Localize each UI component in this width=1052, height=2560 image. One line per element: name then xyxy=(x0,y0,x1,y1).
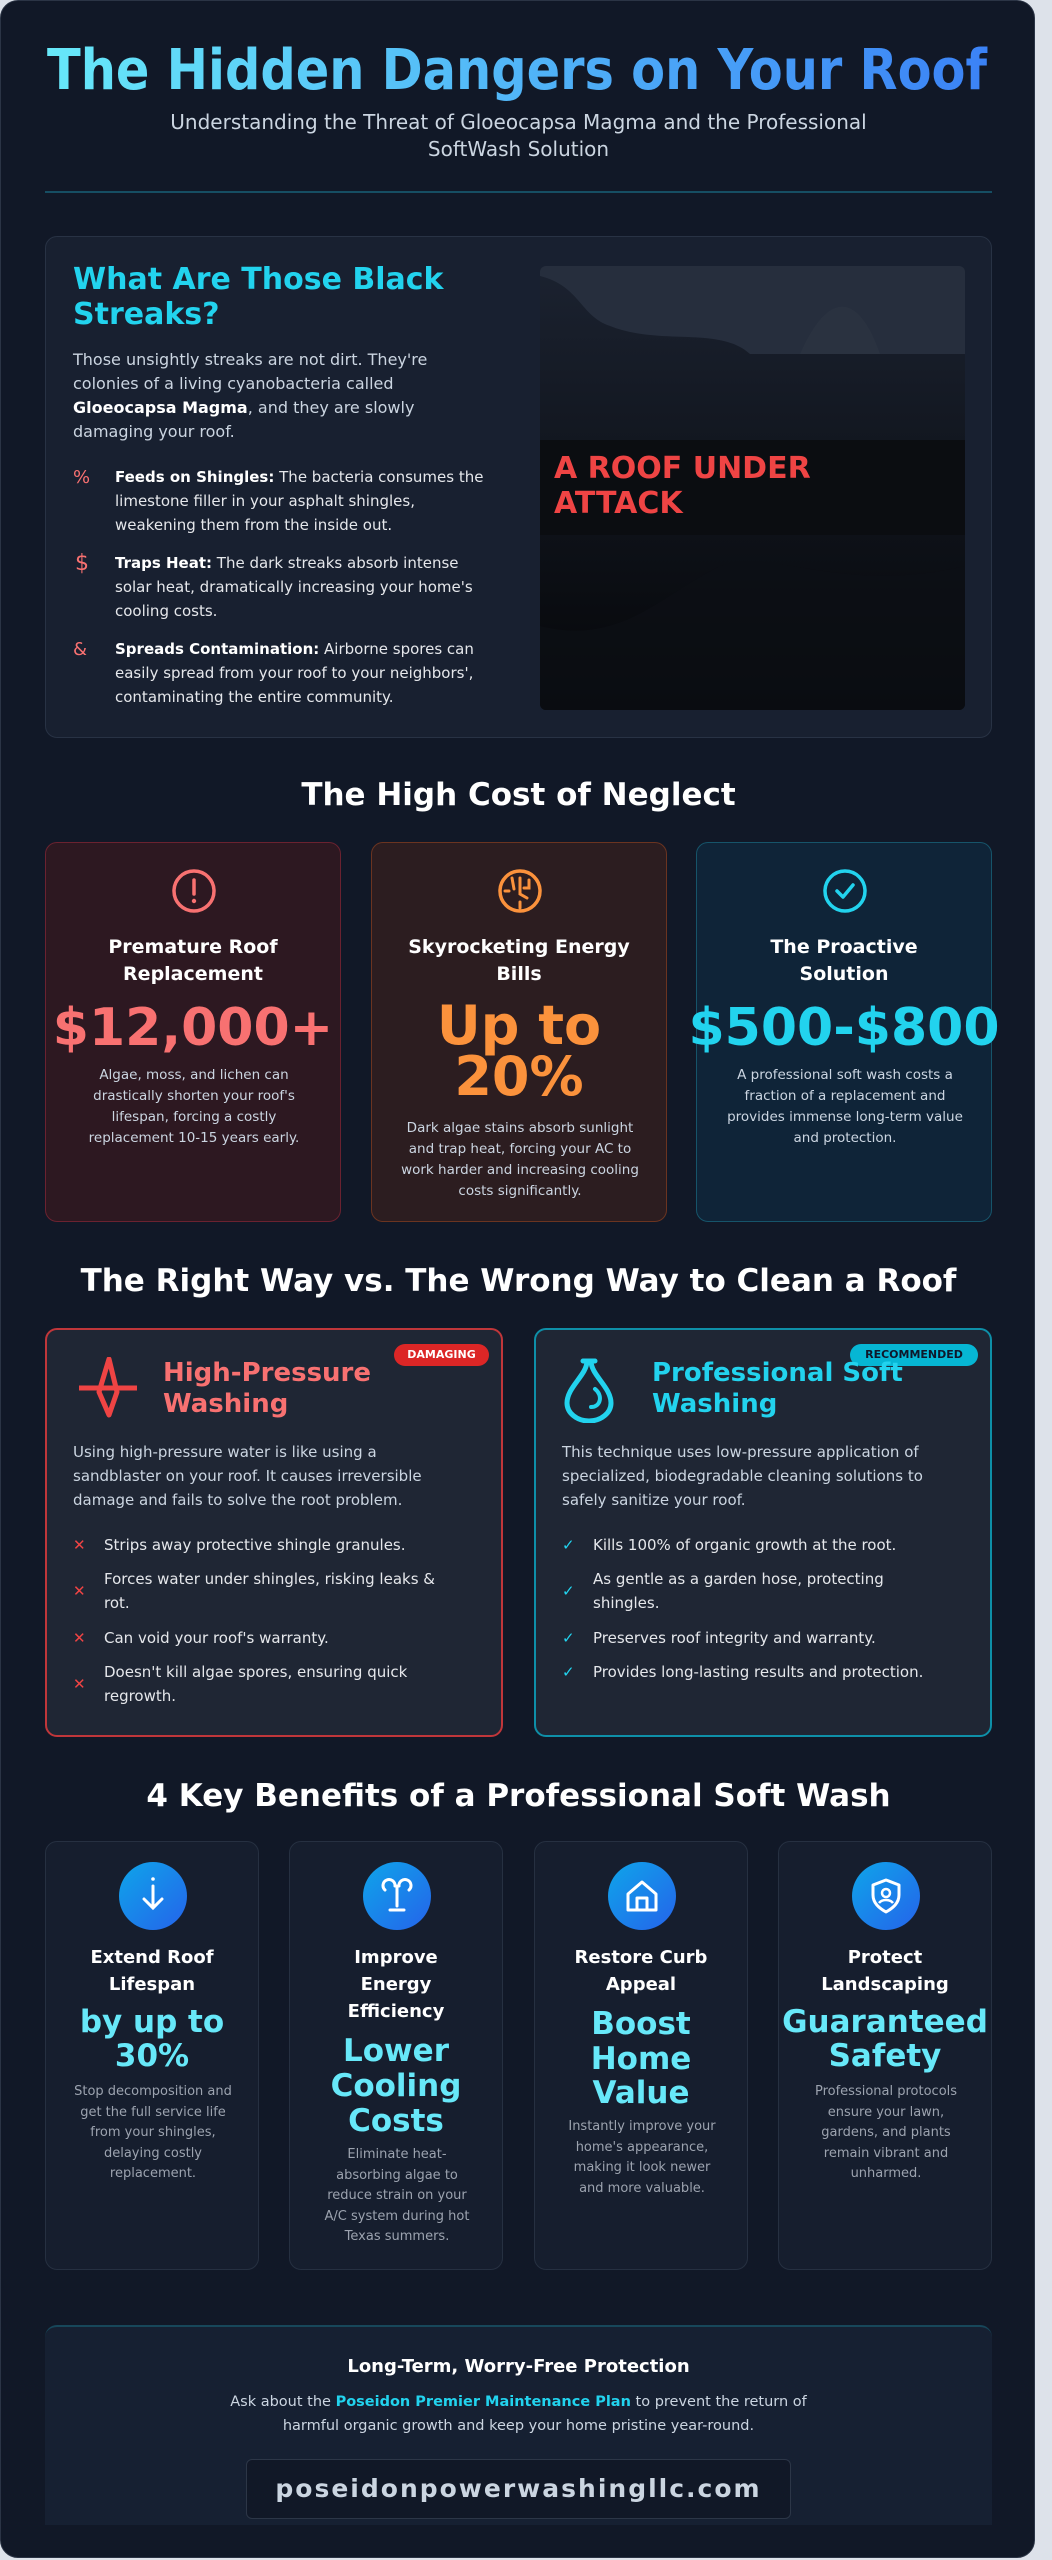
icon: check xyxy=(823,869,867,913)
description: Using high-pressure water is like using a sandblaster on your roof. It causes irreversible damage and fails to solve the root problem. xyxy=(73,1443,422,1509)
card: energy bills xyxy=(371,842,667,1222)
list: pros: ✓ xyxy=(562,1536,575,1554)
benefit: curb appeal: Appeal xyxy=(606,1974,676,1995)
panel: black streaks xyxy=(45,236,992,738)
benefit: energy: Cooling xyxy=(331,2068,461,2104)
benefit: curb appeal: Home xyxy=(591,2040,691,2076)
intro text: Those unsightly streaks are not dirt. They're colonies of a living cyanobacteria called Gloeocapsa Magma, and they are slowly damaging your roof. xyxy=(73,350,427,441)
list: cons: ✕ xyxy=(73,1675,86,1693)
icon: bacteria: % xyxy=(73,467,90,488)
label band xyxy=(540,440,965,535)
benefit: energy: Efficiency xyxy=(348,2001,444,2022)
badge: recommended xyxy=(850,1344,978,1366)
list: pros: ✓ xyxy=(562,1629,575,1647)
icon: dollar: $ xyxy=(75,551,89,576)
heading: Professional Soft xyxy=(652,1358,903,1388)
badge: damaging xyxy=(394,1344,489,1366)
benefit: landscaping: Protect xyxy=(848,1947,922,1968)
list: pros xyxy=(562,1536,923,1681)
heading: high cost: The High Cost of Neglect xyxy=(301,777,736,813)
bullet: spreads: Spreads Contamination: Airborne spores can easily spread from your roof to your neighbors', contaminating the entire community. xyxy=(115,640,474,706)
benefit: energy: Improve xyxy=(354,1947,438,1968)
icon xyxy=(608,1862,676,1930)
benefit: landscaping: Guaranteed xyxy=(782,2004,988,2040)
heading xyxy=(163,1358,371,1419)
icon xyxy=(852,1862,920,1930)
card: energy bills: Dark algae stains absorb sunlight and trap heat, forcing your AC to work harder and increasing cooling costs significantly. xyxy=(401,1120,639,1199)
benefit: energy: Lower xyxy=(343,2033,449,2069)
list: pros: Provides long-lasting results and protection. xyxy=(593,1663,923,1681)
card: roof replacement xyxy=(45,842,341,1222)
website: poseidonpowerwashingllc.com xyxy=(275,2474,762,2503)
card: roof replacement: $12,000+ xyxy=(53,998,333,1058)
footer panel xyxy=(45,2325,992,2525)
badge: recommended: RECOMMENDED xyxy=(865,1348,963,1361)
list: cons: ✕ xyxy=(73,1629,86,1647)
heading: right vs wrong: The Right Way vs. The Wrong Way to Clean a Roof xyxy=(81,1263,956,1299)
benefit: energy: Eliminate heat-absorbing algae to reduce strain on your A/C system during hot Texas summers. xyxy=(324,2147,469,2244)
badge: damaging: DAMAGING xyxy=(407,1348,476,1361)
footer heading: Long-Term, Worry-Free Protection xyxy=(347,2356,690,2377)
bullet: heat: Traps Heat: The dark streaks absorb intense solar heat, dramatically increasing your home's cooling costs. xyxy=(115,554,473,620)
card: roof replacement: Algae, moss, and lichen can drastically shorten your roof's lifespan, forcing a costly replacement 10-15 years early. xyxy=(89,1067,299,1146)
card: roof replacement: Premature Roof xyxy=(108,936,278,958)
subtitle: Understanding the Threat of Gloeocapsa Magma and the Professional SoftWash Solution xyxy=(170,110,867,161)
card: roof replacement: Replacement xyxy=(123,963,263,985)
benefit: roof lifespan: by up to xyxy=(80,2004,224,2040)
image: roof under attack xyxy=(540,266,965,710)
benefit: curb appeal: Instantly improve your home's appearance, making it look newer and more valuable. xyxy=(568,2119,716,2196)
list: cons: Doesn't kill algae spores, ensuring quick regrowth. xyxy=(104,1663,407,1705)
card: energy bills: Up to xyxy=(437,994,601,1057)
card: energy bills: Skyrocketing Energy xyxy=(408,936,630,958)
heading: High-Pressure xyxy=(163,1358,371,1388)
list: pros: ✓ xyxy=(562,1663,575,1681)
panel: high-pressure washing xyxy=(45,1328,503,1737)
icon: pressure xyxy=(79,1357,137,1418)
label band: A ROOF UNDER ATTACK xyxy=(554,451,811,521)
icon xyxy=(119,1862,187,1930)
list: pros: Preserves roof integrity and warranty. xyxy=(593,1629,876,1647)
benefit: landscaping: Safety xyxy=(829,2038,941,2074)
benefit: energy xyxy=(289,1841,503,2270)
bullet: feeds: Feeds on Shingles: The bacteria consumes the limestone filler in your asphalt shingles, weakening them from the inside out. xyxy=(115,468,483,534)
card: proactive solution: The Proactive xyxy=(770,936,918,958)
website xyxy=(246,2459,791,2519)
footer text: Ask about the Poseidon Premier Maintenance Plan to prevent the return of harmful organic growth and keep your home pristine year-round. xyxy=(230,2394,807,2434)
benefit: roof lifespan: Lifespan xyxy=(109,1974,195,1995)
card: proactive solution xyxy=(696,842,992,1222)
heading xyxy=(652,1358,903,1419)
benefit: landscaping: Landscaping xyxy=(821,1974,949,1995)
icon xyxy=(363,1862,431,1930)
benefit: curb appeal xyxy=(534,1841,748,2270)
benefit: roof lifespan: Extend Roof xyxy=(90,1947,214,1968)
list: cons: Strips away protective shingle granules. xyxy=(104,1536,406,1554)
list: cons: Forces water under shingles, risking leaks & rot. xyxy=(104,1570,435,1612)
benefit: landscaping: Professional protocols ensure your lawn, gardens, and plants remain vibrant and unharmed. xyxy=(815,2084,957,2181)
list: cons xyxy=(73,1536,435,1705)
heading: What Are Those Black Streaks? xyxy=(73,262,444,332)
icon: clock xyxy=(498,869,542,913)
icon: spores: & xyxy=(73,639,87,660)
icon: alert xyxy=(172,869,216,913)
list: pros: Kills 100% of organic growth at the root. xyxy=(593,1536,896,1554)
icon: drop xyxy=(564,1358,614,1423)
list: cons: Can void your roof's warranty. xyxy=(104,1629,329,1647)
benefit: energy: Energy xyxy=(361,1974,431,1995)
benefit: curb appeal: Boost xyxy=(591,2006,691,2042)
card: proactive solution: Solution xyxy=(800,963,888,985)
benefit: curb appeal: Restore Curb xyxy=(575,1947,707,1968)
benefit: curb appeal: Value xyxy=(593,2075,689,2111)
list: pros: ✓ xyxy=(562,1582,575,1600)
card: proactive solution: A professional soft wash costs a fraction of a replacement and provides immense long-term value and protection. xyxy=(727,1067,963,1146)
list: cons: ✕ xyxy=(73,1536,86,1554)
benefit: landscaping xyxy=(778,1841,992,2270)
heading: Washing xyxy=(163,1389,288,1419)
benefit: energy: Costs xyxy=(348,2103,444,2139)
card: energy bills: 20% xyxy=(454,1045,584,1108)
description: This technique uses low-pressure application of specialized, biodegradable cleaning solutions to safely sanitize your roof. xyxy=(562,1443,923,1509)
heading: Washing xyxy=(652,1389,777,1419)
heading: benefits: 4 Key Benefits of a Professional Soft Wash xyxy=(146,1778,891,1814)
panel: soft washing xyxy=(534,1328,992,1737)
card: energy bills: Bills xyxy=(496,963,542,985)
list: pros: As gentle as a garden hose, protecting shingles. xyxy=(593,1570,884,1612)
benefit: roof lifespan: 30% xyxy=(115,2038,189,2074)
card: proactive solution: $500-$800 xyxy=(688,998,1000,1058)
benefit: roof lifespan: Stop decomposition and get the full service life from your shingles, delaying costly replacement. xyxy=(74,2084,232,2181)
list: cons: ✕ xyxy=(73,1582,86,1600)
benefit: roof lifespan xyxy=(45,1841,259,2270)
